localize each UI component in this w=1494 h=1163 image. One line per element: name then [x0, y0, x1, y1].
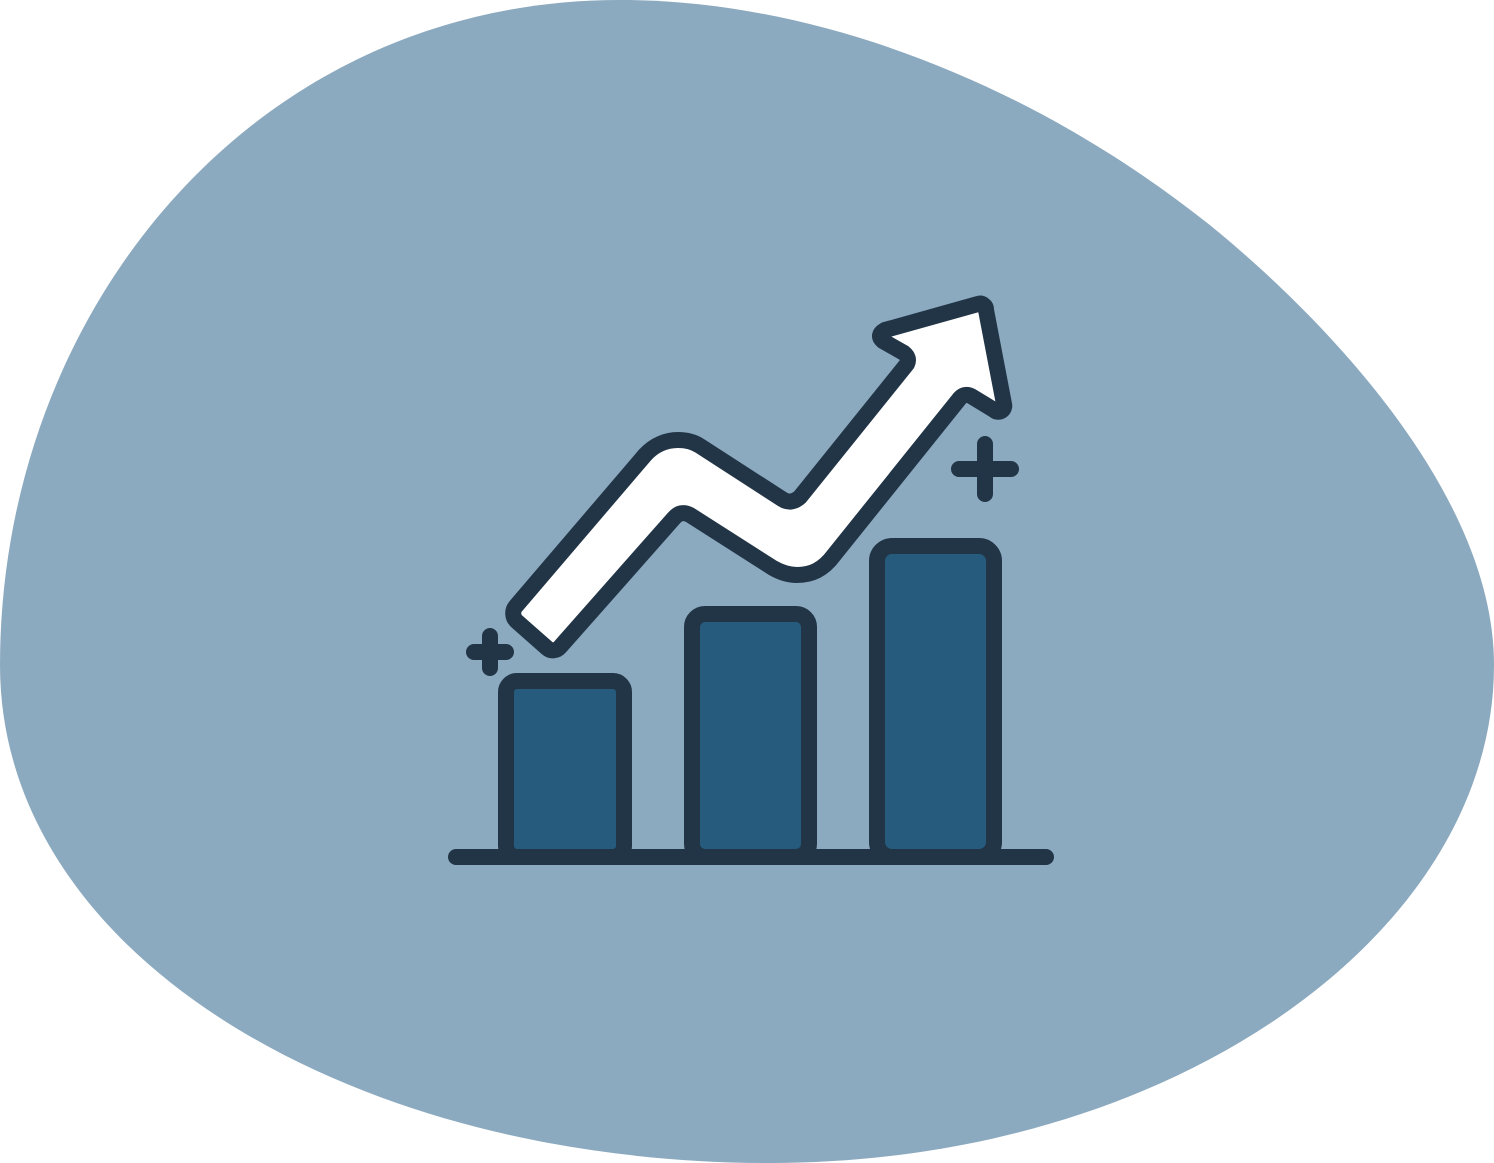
bar: tall	[877, 546, 994, 857]
bar: medium	[692, 614, 809, 857]
baseline axis	[456, 849, 1046, 865]
rising arrow	[513, 304, 1004, 650]
bar: small	[506, 681, 624, 857]
icon: small plus sparkle	[474, 636, 506, 668]
bar chart	[506, 546, 994, 857]
icon: large plus sparkle	[959, 444, 1011, 494]
